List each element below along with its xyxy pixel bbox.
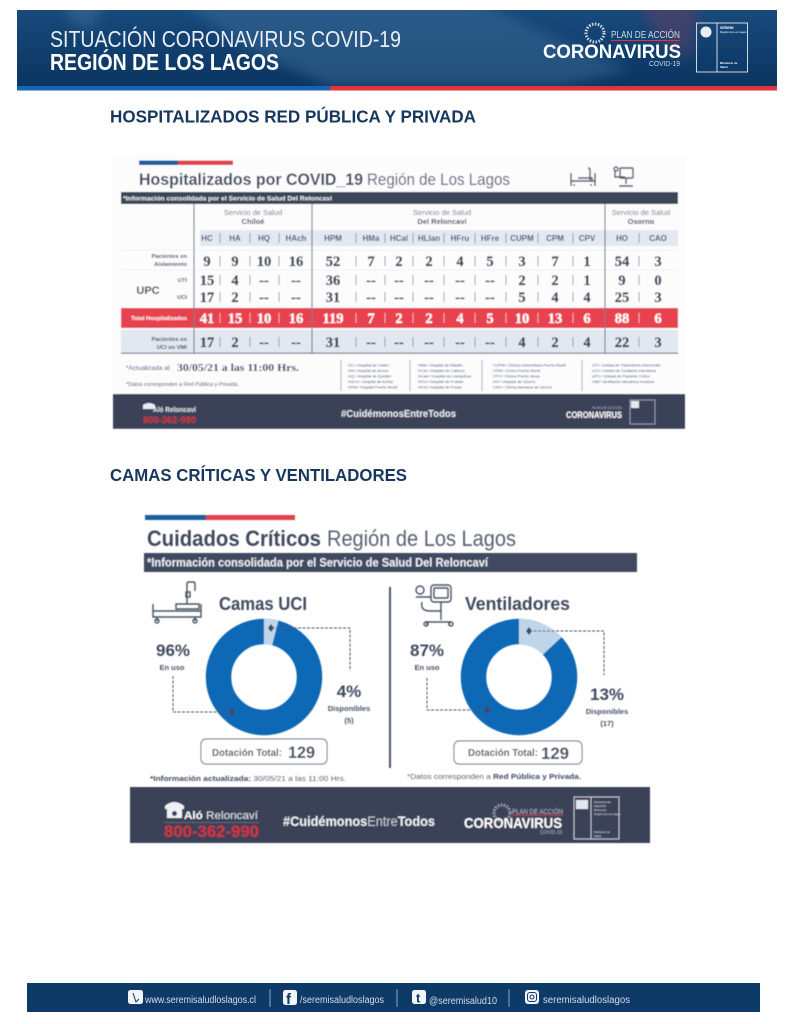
row: upc uci: 2 — [231, 290, 239, 306]
row: pacientes en uci en vmi: -- — [291, 335, 301, 351]
glossary: VMI= Ventilación Mecánica Invasiva — [592, 379, 655, 384]
callout: disponibles 4% — [268, 624, 370, 725]
callout: disponibles 4%: 4% — [337, 682, 361, 701]
plan de acción logo: CORONAVIRUS — [464, 815, 562, 832]
seremi logo: Ministerio de — [720, 61, 738, 65]
row: total hospitalizados: 4 — [456, 311, 464, 327]
row: pacientes en uci en vmi: 22 — [615, 335, 629, 351]
donut: camas uci — [218, 632, 310, 722]
row: total hospitalizados: 5 — [486, 311, 494, 327]
row: pacientes en aislamiento: 9 — [203, 254, 211, 270]
row: pacientes en aislamiento: 9 — [231, 254, 239, 270]
row: pacientes en aislamiento: 3 — [654, 254, 662, 270]
panel title: Región de Los Lagos — [327, 526, 516, 551]
icon: telephone — [165, 802, 184, 818]
row: upc uci: -- — [366, 290, 376, 306]
hotline — [164, 810, 259, 841]
update note — [126, 363, 299, 388]
panel: hospitalizados table — [113, 155, 685, 430]
icon: facebook: f — [286, 991, 292, 1008]
service headers: Servicio de Salud — [224, 208, 282, 217]
row: upc uti: 0 — [654, 273, 662, 289]
row: upc uci: -- — [485, 290, 495, 306]
glossary: HPM= Hospital Puerto Montt — [348, 384, 398, 390]
row: pacientes en aislamiento: 2 — [395, 254, 403, 270]
panel title — [147, 526, 516, 551]
row: total hospitalizados: 6 — [654, 311, 662, 327]
row: total hospitalizados: 15 — [228, 311, 242, 327]
glossary: HLlan= Hospital de Llanquihue — [418, 374, 471, 378]
row: upc uci: -- — [424, 290, 434, 306]
table title: Hospitalizados por COVID_19 — [139, 170, 363, 189]
row: upc uci — [177, 290, 662, 306]
row: pacientes en uci en vmi: Pacientes en — [152, 337, 187, 343]
panel title: Cuidados Críticos — [147, 526, 321, 551]
glossary: HFru= Hospital de Frutillar — [418, 379, 464, 384]
row: upc uci: 31 — [326, 290, 340, 306]
icon: ventilator — [614, 167, 633, 186]
row: upc uti: -- — [455, 273, 465, 289]
icon: instagram — [525, 990, 539, 1004]
plan de acción logo: PLAN DE ACCIÓN — [611, 28, 680, 41]
divider — [389, 587, 391, 768]
glossary: HACh= Hospital de Achao — [348, 379, 393, 384]
callout: en uso 87%: En uso — [414, 663, 440, 672]
seremi logo: Salud — [720, 65, 728, 69]
heading: ventiladores: Ventiladores — [465, 594, 570, 614]
row: pacientes en uci en vmi: -- — [455, 335, 465, 351]
header title: REGIÓN DE LOS LAGOS — [50, 48, 279, 75]
row: pacientes en uci en vmi: 31 — [326, 335, 340, 351]
row: upc uci: -- — [259, 290, 269, 306]
header title — [50, 26, 401, 75]
plan de acción logo — [543, 24, 681, 68]
row: upc uci: 4 — [583, 290, 591, 306]
row: total hospitalizados: 6 — [583, 311, 591, 327]
donut: ventiladores — [474, 632, 564, 722]
row: total hospitalizados: 119 — [323, 311, 343, 327]
seremi logo — [696, 23, 748, 72]
row: pacientes en aislamiento: 7 — [367, 254, 375, 270]
table title — [139, 170, 510, 189]
row: upc uti: -- — [291, 273, 301, 289]
heading: camas críticas: CAMAS CRÍTICAS Y VENTILADORES — [110, 464, 407, 485]
table footer banner: CORONAVIRUS — [566, 410, 622, 420]
table footer banner — [113, 394, 685, 429]
heading: hospitalizados: HOSPITALIZADOS RED PÚBLICA Y PRIVADA — [110, 106, 476, 126]
seremi logo: Salud Del — [594, 804, 607, 808]
text: website: www.seremisaludloslagos.cl — [144, 995, 256, 1006]
glossary: CAO= Clínica Alemana de Osorno — [493, 384, 552, 390]
column headers: CPM — [546, 234, 564, 243]
row: upc uti: 1 — [583, 273, 591, 289]
row: total hospitalizados: 7 — [367, 311, 375, 327]
glossary: UTI= Unidad de Tratamiento Intermedio — [592, 362, 660, 368]
glossary: HCal= Hospital de Calbuco — [418, 368, 465, 373]
callout: en uso 96%: 96% — [156, 641, 190, 660]
total box: ventiladores: Dotación Total: — [468, 747, 538, 759]
row: upc uci: -- — [291, 290, 301, 306]
row: upc uti: -- — [259, 273, 269, 289]
column headers: HFre — [481, 234, 500, 243]
callout: en uso 87% — [410, 641, 490, 714]
column headers: HA — [229, 234, 241, 243]
info bar: *Información consolidada por el Servicio de Salud Del Reloncaví — [147, 558, 489, 570]
row: pacientes en aislamiento: Pacientes en — [152, 254, 187, 260]
callout: disponibles 13%: Disponibles — [586, 707, 628, 716]
note: datos corresponden: *Datos corresponden a Red Pública y Privada. — [407, 772, 581, 781]
glossary: CPV= Clínica Puerto Varas — [493, 374, 540, 378]
callout: disponibles 13%: 13% — [590, 685, 624, 704]
row: total hospitalizados — [131, 311, 662, 327]
update note: *Actualizada al: — [126, 365, 171, 372]
row: upc uci: -- — [455, 290, 465, 306]
callout: disponibles 13% — [526, 627, 628, 728]
column headers: HC — [201, 234, 213, 243]
row: upc uti: -- — [366, 273, 376, 289]
row: upc uti: 2 — [518, 273, 526, 289]
total box: ventiladores: 129 — [541, 744, 569, 763]
row: total hospitalizados: 10 — [515, 311, 529, 327]
table footer banner: PLAN DE ACCIÓN — [592, 405, 622, 410]
icon: bed — [571, 168, 595, 186]
row: upc uci: UCI — [177, 295, 187, 301]
row: pacientes en uci en vmi: 2 — [551, 335, 559, 351]
total box: camas uci: Dotación Total: — [212, 747, 282, 759]
column headers: HFru — [451, 234, 469, 243]
row: total hospitalizados: 2 — [425, 311, 433, 327]
row: pacientes en uci en vmi: UCI en VMI — [157, 345, 187, 351]
callout: en uso 87%: 87% — [410, 641, 444, 660]
column headers: CUPM — [510, 234, 534, 243]
row: upc uti: -- — [394, 273, 404, 289]
heading: camas uci: Camas UCI — [219, 594, 307, 614]
header banner — [17, 10, 777, 90]
service headers: Servicio de Salud — [612, 208, 670, 217]
panel: cuidados críticos — [130, 515, 650, 843]
plan de acción logo: CORONAVIRUS — [543, 42, 681, 63]
row: pacientes en aislamiento: 16 — [289, 254, 303, 270]
row: total hospitalizados: 16 — [289, 311, 303, 327]
seremi logo — [574, 797, 621, 839]
update note: *Datos corresponden a Red Pública y Privada. — [126, 382, 239, 388]
row: total hospitalizados: 41 — [200, 311, 214, 327]
plan de acción logo: COVID-19 — [649, 61, 680, 68]
hashtag: #CuidémonosEntreTodos — [283, 813, 435, 829]
glossary: UCI= Unidad de Cuidados Intensivos — [592, 368, 656, 373]
total box: ventiladores — [454, 741, 582, 764]
icon: twitter — [412, 990, 426, 1006]
info bar: *Información consolidada por el Servicio de Salud Del Reloncaví — [123, 196, 333, 202]
total box: camas uci — [201, 739, 327, 764]
info bar — [121, 192, 678, 204]
glossary: HFre= Hospital de Fresia — [418, 384, 462, 390]
row: pacientes en uci en vmi: 3 — [654, 335, 662, 351]
footer bar — [27, 983, 760, 1012]
glossary: HA= Hospital de Ancud — [348, 368, 388, 373]
row: pacientes en aislamiento: 7 — [551, 254, 559, 270]
info bar — [144, 553, 637, 572]
row: pacientes en uci en vmi: -- — [366, 335, 376, 351]
row: upc uti: 9 — [618, 273, 626, 289]
glossary: CUPM= Clínica Universitaria Puerto Montt — [493, 362, 567, 368]
service headers: Chiloé — [242, 217, 264, 226]
row: upc uti: UPC — [136, 285, 160, 297]
text: instagram: seremisaludloslagos — [543, 995, 630, 1006]
glossary: UPC= Unidad de Paciente Crítico — [592, 374, 650, 378]
row: pacientes en uci en vmi: -- — [259, 335, 269, 351]
text: facebook: /seremisaludloslagos — [300, 995, 384, 1006]
row: pacientes en aislamiento: 4 — [456, 254, 464, 270]
update note: 30/05/21 a las 11:00 Hrs. — [177, 363, 299, 374]
column headers: HPM — [324, 234, 342, 243]
glossary: HC= Hospital de Castro — [348, 362, 389, 368]
plan de acción logo: PLAN DE ACCIÓN — [512, 807, 563, 816]
service headers: Osorno — [628, 217, 655, 226]
bottom banner — [130, 787, 650, 843]
glossary — [341, 360, 660, 391]
hotline: Aló Reloncaví — [184, 810, 258, 822]
plan de acción logo: COVID-19 — [540, 830, 562, 836]
column headers: HCal — [390, 234, 408, 243]
column headers: HQ — [258, 234, 270, 243]
row: pacientes en uci en vmi: 4 — [518, 335, 526, 351]
row: total hospitalizados: 10 — [257, 311, 271, 327]
row: total hospitalizados: 2 — [395, 311, 403, 327]
row: pacientes en aislamiento: Aislamiento — [154, 262, 187, 268]
row: pacientes en aislamiento: 5 — [486, 254, 494, 270]
table title: Región de Los Lagos — [367, 170, 510, 189]
row: total hospitalizados: 88 — [615, 311, 629, 327]
icon: facebook — [283, 990, 297, 1008]
total box: camas uci: 129 — [288, 743, 315, 762]
service headers — [224, 208, 670, 226]
column headers: HMa — [363, 234, 380, 243]
row: upc uci: 25 — [615, 290, 629, 306]
row: upc uti — [136, 273, 662, 297]
row: upc uti: -- — [424, 273, 434, 289]
callout: disponibles 4%: (5) — [344, 716, 354, 725]
glossary: HMa= Hospital de Maullín — [418, 362, 463, 368]
row: pacientes en aislamiento: 1 — [583, 254, 591, 270]
icon: twitter: t — [416, 990, 421, 1006]
callout: en uso 96%: En uso — [159, 663, 185, 672]
row: total hospitalizados: 13 — [548, 311, 562, 327]
table footer banner: #CuidémonosEntreTodos — [341, 409, 456, 420]
glossary: CPM= Clínica Puerto Montt — [493, 368, 541, 373]
text: twitter: @seremisalud10 — [429, 996, 497, 1007]
seremi logo: Región de Los Lagos — [720, 30, 747, 34]
row: pacientes en aislamiento: 10 — [257, 254, 271, 270]
icon: ventilator — [416, 585, 453, 626]
column headers: CPV — [579, 234, 596, 243]
row: pacientes en aislamiento: 2 — [425, 254, 433, 270]
icon: bed — [153, 582, 201, 623]
callout: disponibles 4%: Disponibles — [328, 704, 370, 713]
row: pacientes en uci en vmi: 2 — [231, 335, 239, 351]
row: pacientes en aislamiento — [152, 254, 662, 270]
seremi logo: Región de Los Lagos — [594, 812, 621, 816]
row: pacientes en uci en vmi: 17 — [200, 335, 214, 351]
callout: en uso 96% — [156, 641, 235, 716]
seremi logo: SEREMI — [720, 26, 733, 30]
table footer banner: 800-362-990 — [143, 415, 196, 426]
row: pacientes en aislamiento: 3 — [518, 254, 526, 270]
row: pacientes en uci en vmi — [152, 335, 662, 351]
seremi logo: Secretaría de — [594, 800, 611, 804]
row: upc uti: 4 — [231, 273, 239, 289]
row: upc uti: 2 — [551, 273, 559, 289]
seremi logo: Ministerio de — [594, 830, 610, 834]
row: upc uci: 17 — [200, 290, 214, 306]
icon: web — [128, 990, 143, 1004]
row: upc uti: UTI — [178, 278, 187, 284]
row: upc uci: -- — [394, 290, 404, 306]
service headers: Del Reloncaví — [417, 217, 468, 226]
row: upc uti: 36 — [326, 273, 340, 289]
row: upc uti: 15 — [200, 273, 214, 289]
row: pacientes en uci en vmi: -- — [424, 335, 434, 351]
glossary: HO= Hospital de Osorno — [493, 379, 536, 384]
hotline: 800-362-990 — [164, 822, 259, 841]
column headers — [201, 234, 667, 243]
column separators — [220, 233, 639, 347]
column headers: HO — [616, 234, 628, 243]
service headers: Servicio de Salud — [413, 208, 471, 217]
row: upc uci: 3 — [654, 290, 662, 306]
row: upc uci: 4 — [551, 290, 559, 306]
note: información actualizada: *Información actualizada: 30/05/21 a las 11:00 Hrs. — [150, 774, 346, 783]
header title: SITUACIÓN CORONAVIRUS COVID-19 — [50, 26, 401, 52]
seremi logo: Reloncaví — [594, 808, 607, 812]
table footer banner: Aló Reloncaví — [153, 407, 197, 414]
column headers: CAO — [649, 234, 667, 243]
glossary: HQ= Hospital de Quellón — [348, 374, 391, 378]
row: upc uci: 5 — [518, 290, 526, 306]
callout: disponibles 13%: (17) — [600, 719, 614, 728]
column bands — [121, 204, 678, 354]
column headers: HLlan — [418, 234, 440, 243]
column headers: HAch — [286, 234, 307, 243]
seremi logo: Salud — [594, 834, 602, 838]
row: upc uti: -- — [485, 273, 495, 289]
row: pacientes en uci en vmi: 4 — [583, 335, 591, 351]
row: pacientes en aislamiento: 52 — [326, 254, 340, 270]
row: pacientes en aislamiento: 54 — [615, 254, 629, 270]
row: total hospitalizados: Total Hospitalizados — [131, 316, 187, 322]
row: pacientes en uci en vmi: -- — [485, 335, 495, 351]
plan de acción logo — [464, 805, 563, 836]
row: pacientes en uci en vmi: -- — [394, 335, 404, 351]
